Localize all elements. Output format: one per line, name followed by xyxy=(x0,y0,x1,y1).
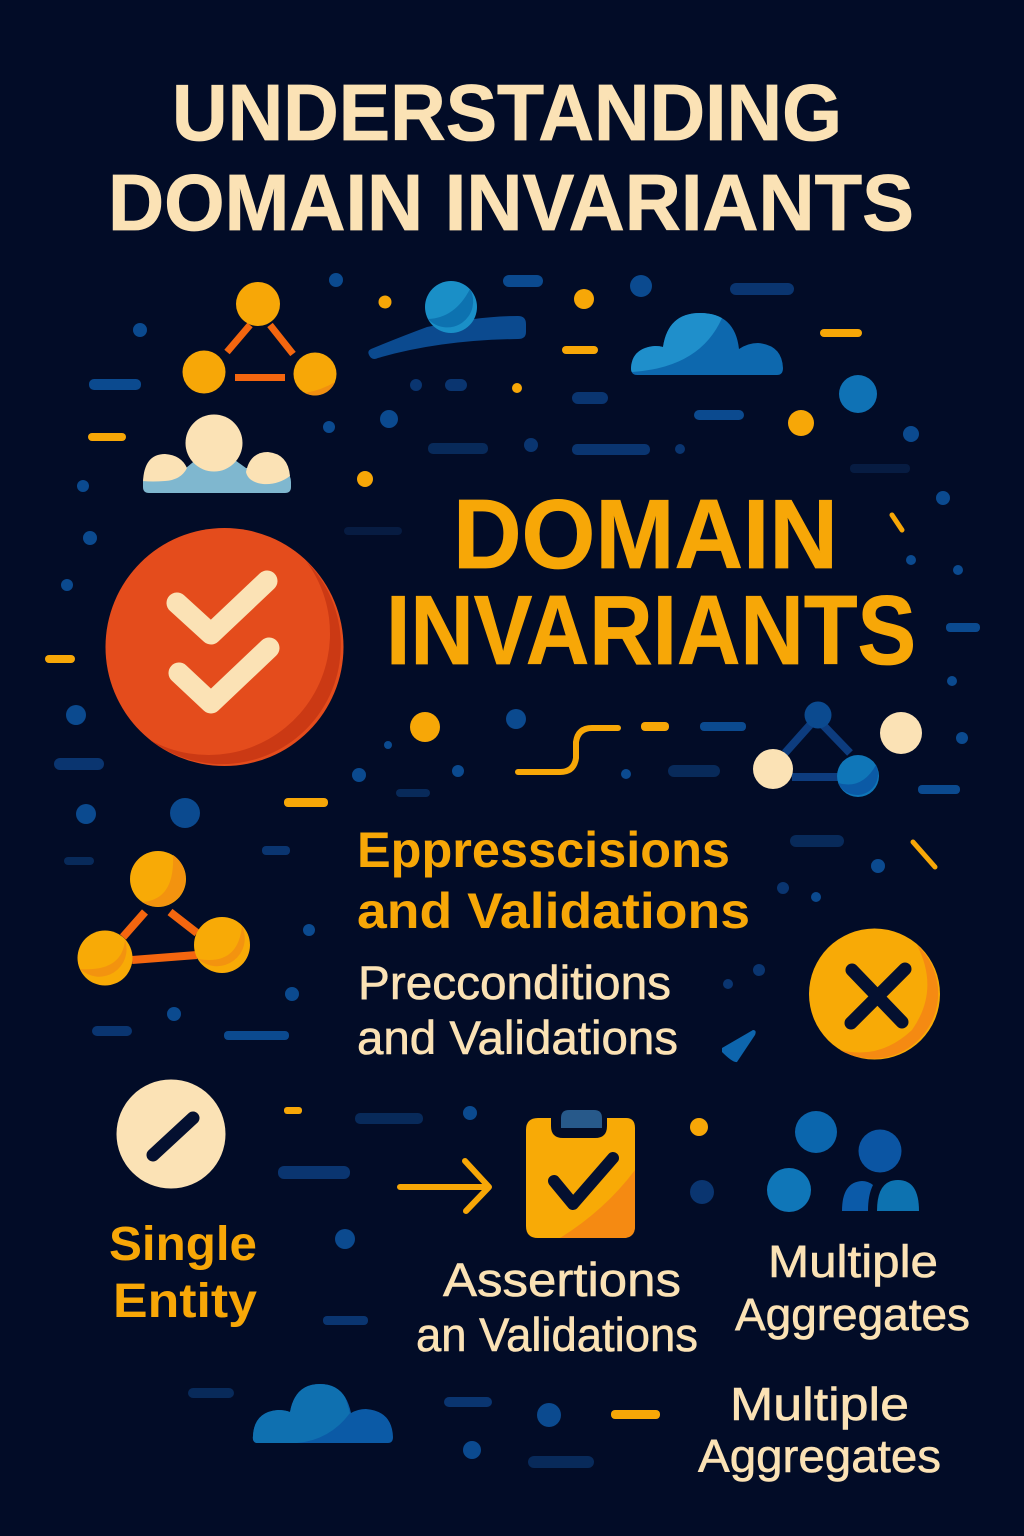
text: multiple aggregates lower: Multiple xyxy=(730,1378,909,1430)
title xyxy=(108,68,914,247)
text: expressions and validations: Eppresscisions xyxy=(357,822,730,878)
icon: people group xyxy=(767,1111,919,1212)
text: single entity: Entity xyxy=(113,1275,257,1328)
icon: blue cloud top xyxy=(631,313,783,375)
text: multiple aggregates lower xyxy=(698,1378,941,1482)
arrow xyxy=(400,1161,489,1211)
icon: cream cloud xyxy=(143,414,291,493)
text: assertions and validations: an Validations xyxy=(416,1308,698,1361)
title: UNDERSTANDING xyxy=(172,68,842,157)
text: assertions and validations xyxy=(416,1253,698,1361)
icon: cream and blue network xyxy=(753,702,922,797)
text: preconditions and validations: Precconditions xyxy=(358,956,671,1009)
text: expressions and validations xyxy=(357,822,750,939)
text: multiple aggregates upper: Aggregates xyxy=(735,1289,970,1340)
icon: cream slash circle xyxy=(116,1080,226,1188)
title: DOMAIN INVARIANTS xyxy=(108,158,914,247)
icon: orange x circle xyxy=(809,928,940,1060)
text: assertions and validations: Assertions xyxy=(443,1253,681,1306)
text: single entity: Single xyxy=(109,1218,257,1271)
text: multiple aggregates lower: Aggregates xyxy=(698,1430,941,1482)
text: preconditions and validations xyxy=(357,956,678,1064)
icon: red double check circle xyxy=(106,528,344,766)
icon: blue ball and swoosh xyxy=(368,281,526,359)
background dots and dashes xyxy=(45,273,980,1468)
heading: domain invariants: DOMAIN xyxy=(453,479,838,589)
text: preconditions and validations: and Validations xyxy=(357,1011,678,1064)
icon: blue cloud bottom xyxy=(252,1384,393,1443)
heading: domain invariants: INVARIANTS xyxy=(386,575,916,685)
icon: orange network triangle top xyxy=(182,282,336,396)
connector line xyxy=(518,728,618,772)
heading: domain invariants xyxy=(386,479,916,685)
text: expressions and validations: and Validations xyxy=(357,883,750,939)
text: multiple aggregates upper: Multiple xyxy=(768,1236,938,1287)
text: single entity xyxy=(109,1218,257,1328)
icon: clipboard check xyxy=(526,1110,635,1238)
icon: orange network left xyxy=(78,851,250,986)
text: multiple aggregates upper xyxy=(735,1236,970,1340)
